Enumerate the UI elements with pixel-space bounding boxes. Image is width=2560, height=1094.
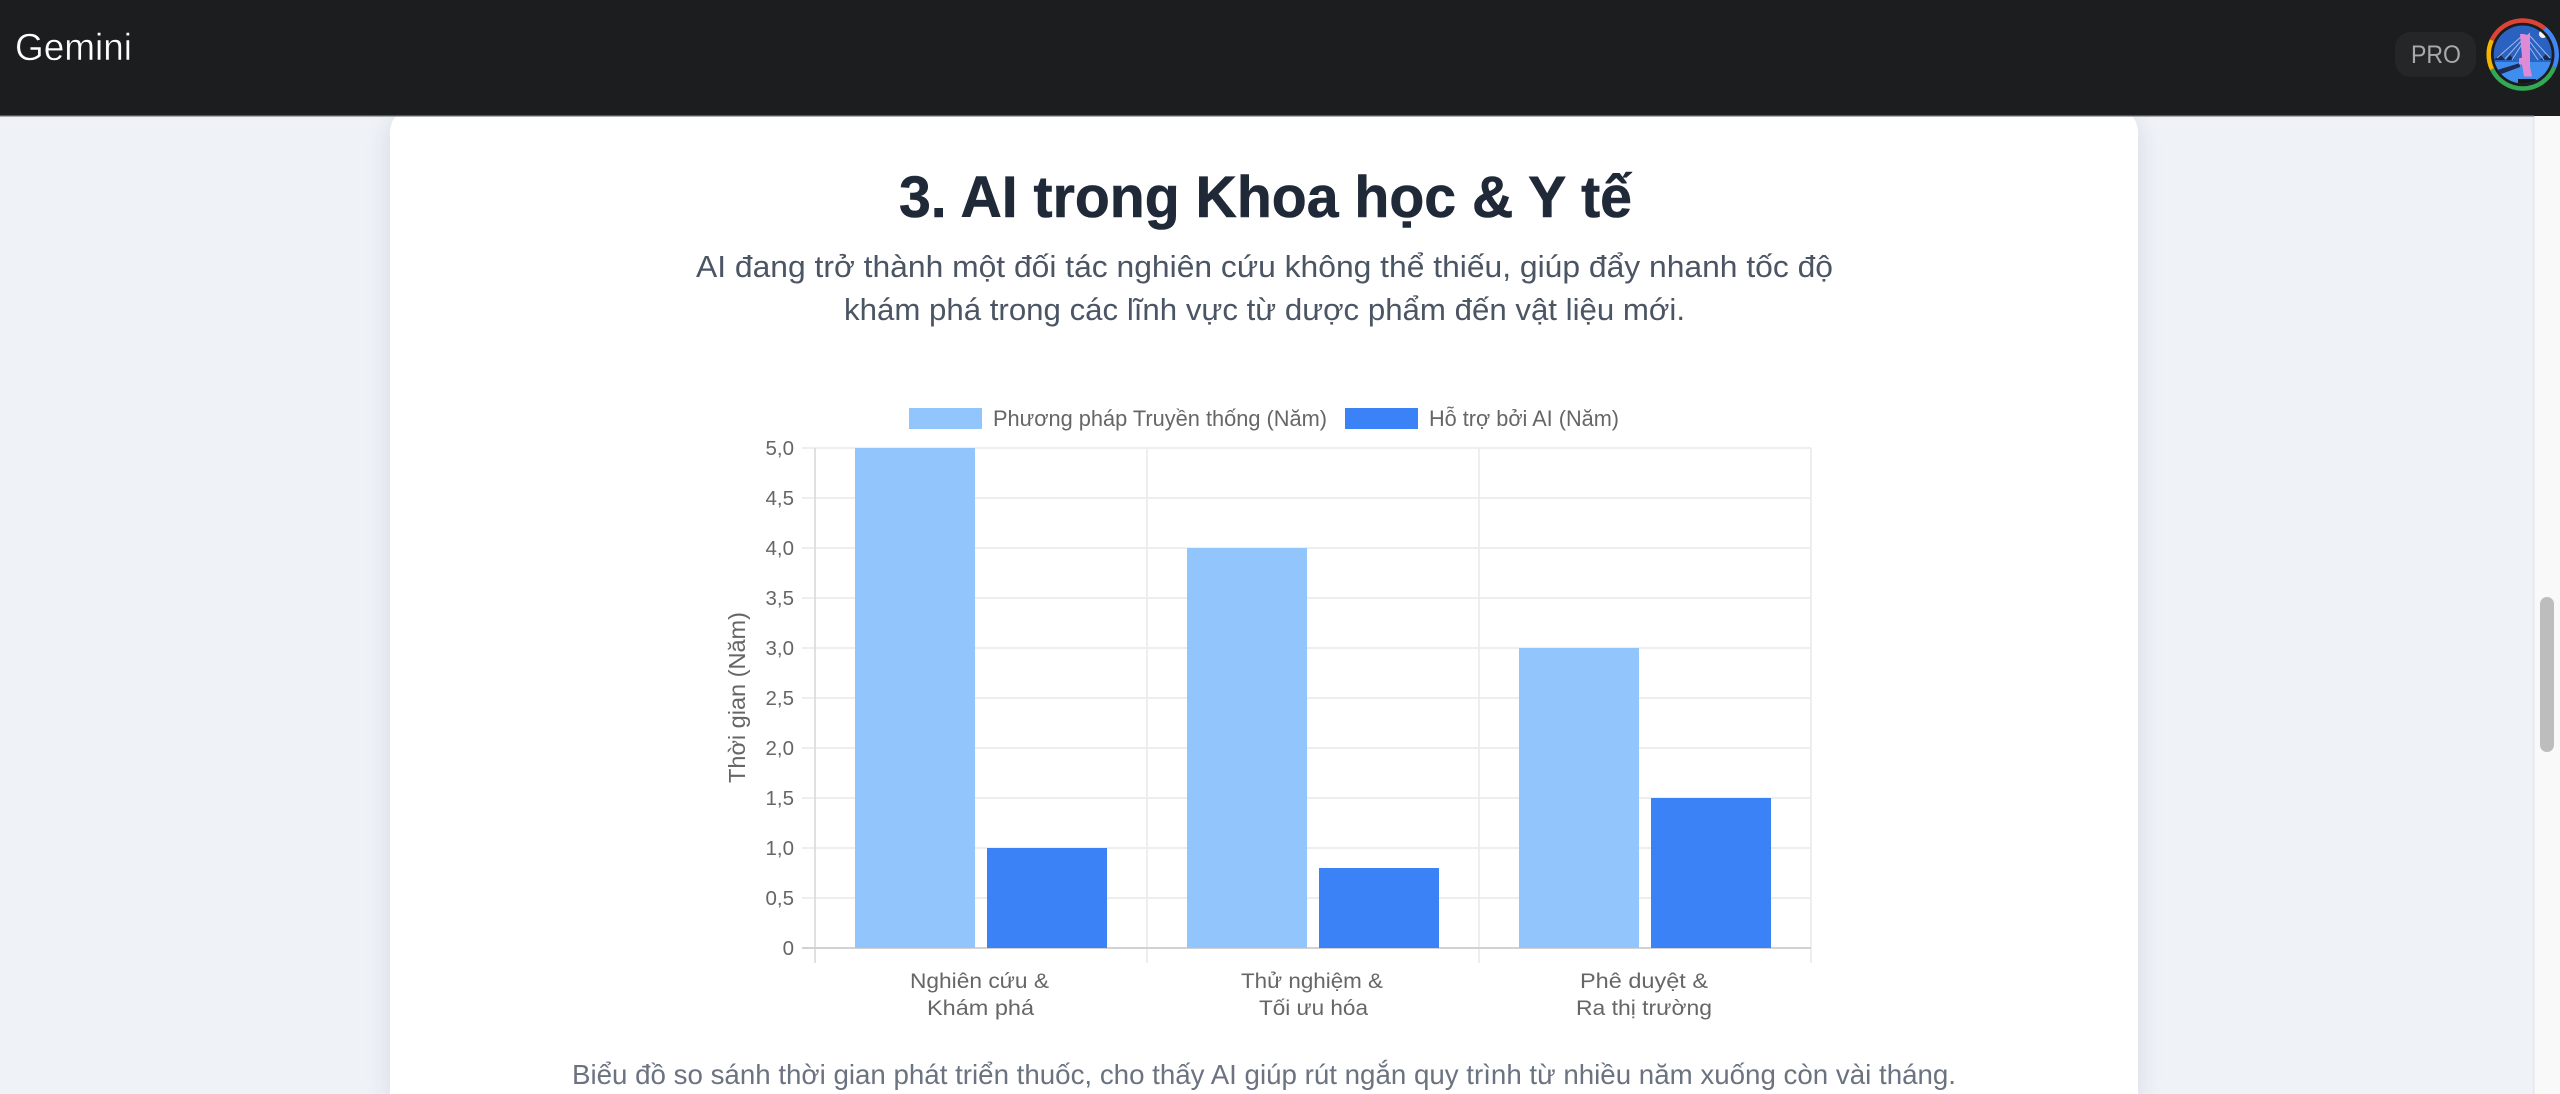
PRO badge xyxy=(2395,32,2476,77)
icon: user avatar with bridge and multicolor ring xyxy=(2489,20,2557,89)
x axis category labels: Tối ưu hóa xyxy=(1259,996,1368,1020)
legend: Hỗ trợ bởi AI (Năm) xyxy=(1429,406,1619,431)
y axis tick labels: 4,5 xyxy=(766,487,794,510)
bars: traditional method xyxy=(855,448,1639,948)
PRO badge: PRO xyxy=(2411,41,2461,69)
y axis tick labels xyxy=(766,437,794,960)
y axis tick labels: 4,0 xyxy=(766,537,794,560)
x axis category labels: Khám phá xyxy=(927,996,1034,1020)
subtitle xyxy=(696,249,1833,327)
legend: Phương pháp Truyền thống (Năm) xyxy=(993,406,1327,431)
y axis tick labels: 0,5 xyxy=(766,887,794,910)
y axis tick labels: 1,5 xyxy=(766,787,794,810)
y axis title: Thời gian (Năm) xyxy=(724,612,750,783)
x axis category labels: Nghiên cứu & xyxy=(910,969,1049,993)
y axis tick labels: 3,5 xyxy=(766,587,794,610)
scrollbar xyxy=(2533,116,2560,1094)
bars: AI assisted xyxy=(987,798,1771,948)
y axis tick labels: 3,0 xyxy=(766,637,794,660)
x axis category labels xyxy=(910,969,1712,1020)
subtitle: AI đang trở thành một đối tác nghiên cứu không thể thiếu, giúp đẩy nhanh tốc độ xyxy=(696,249,1833,284)
y axis tick labels: 2,0 xyxy=(766,737,794,760)
x axis category labels: Ra thị trường xyxy=(1576,996,1712,1020)
x axis category labels: Phê duyệt & xyxy=(1580,969,1708,993)
y axis tick labels: 2,5 xyxy=(766,687,794,710)
bar chart: drug development time xyxy=(724,406,1811,1020)
y axis tick labels: 0 xyxy=(783,937,794,960)
app name: Gemini: Gemini xyxy=(15,27,132,69)
legend xyxy=(909,406,1619,431)
y axis tick labels: 5,0 xyxy=(766,437,794,460)
panel: white content card xyxy=(390,108,2138,1094)
top app bar xyxy=(0,0,2560,117)
subtitle: khám phá trong các lĩnh vực từ dược phẩm đến vật liệu mới. xyxy=(844,292,1685,327)
title: 3. AI trong Khoa học & Y tế xyxy=(899,165,1633,230)
y axis tick labels: 1,0 xyxy=(766,837,794,860)
chart caption: Biểu đồ so sánh thời gian phát triển thuốc, cho thấy AI giúp rút ngắn quy trình từ nhiều năm xuống còn vài tháng. xyxy=(572,1059,1956,1090)
x axis category labels: Thử nghiệm & xyxy=(1241,969,1383,993)
